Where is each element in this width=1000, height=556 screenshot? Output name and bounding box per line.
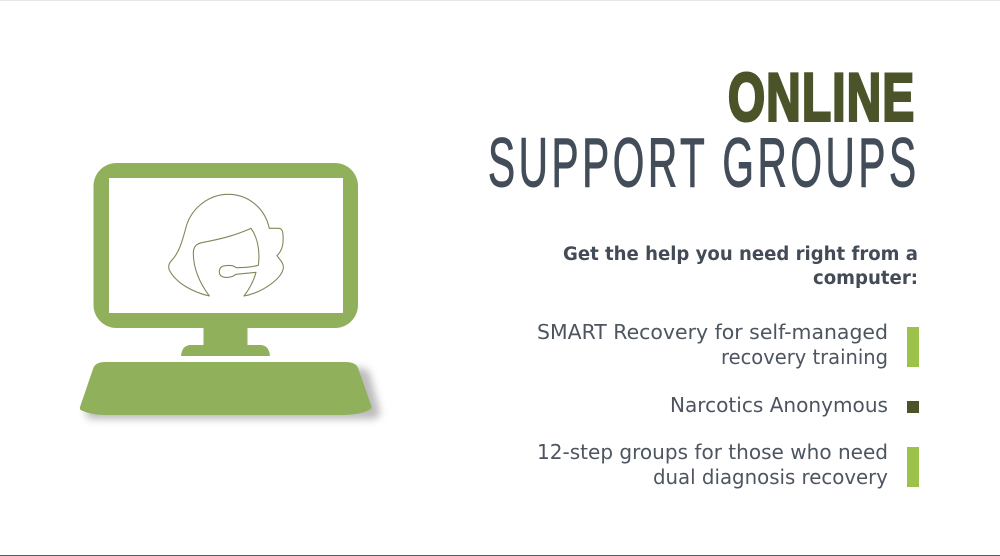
list item: Narcotics Anonymous bbox=[670, 393, 919, 417]
keyboard bbox=[80, 362, 372, 415]
item text: Narcotics Anonymous bbox=[670, 393, 888, 417]
support agent outline bbox=[169, 194, 283, 296]
item text bbox=[537, 440, 888, 489]
title line: SUPPORT GROUPS: SUPPORT GROUPS bbox=[488, 124, 916, 202]
list item: SMART Recovery bbox=[537, 320, 919, 369]
item text: recovery training bbox=[721, 345, 888, 369]
item marker bbox=[907, 401, 919, 413]
title bbox=[488, 60, 916, 202]
keyboard shadow bbox=[86, 368, 380, 419]
item text: dual diagnosis recovery bbox=[653, 465, 888, 489]
item text bbox=[537, 320, 888, 369]
title line: ONLINE: ONLINE bbox=[728, 60, 914, 136]
monitor stand bbox=[181, 328, 270, 356]
monitor frame bbox=[94, 163, 358, 328]
icon: computer with support agent bbox=[80, 163, 380, 419]
item text: 12-step groups for those who need bbox=[537, 440, 888, 464]
intro text: computer: bbox=[813, 268, 918, 289]
intro text bbox=[563, 244, 918, 289]
intro text: Get the help you need right from a bbox=[563, 244, 918, 265]
item marker bbox=[907, 447, 919, 487]
item marker bbox=[907, 327, 919, 367]
list item: 12-step groups bbox=[537, 440, 919, 489]
item text: SMART Recovery for self-managed bbox=[537, 320, 888, 344]
